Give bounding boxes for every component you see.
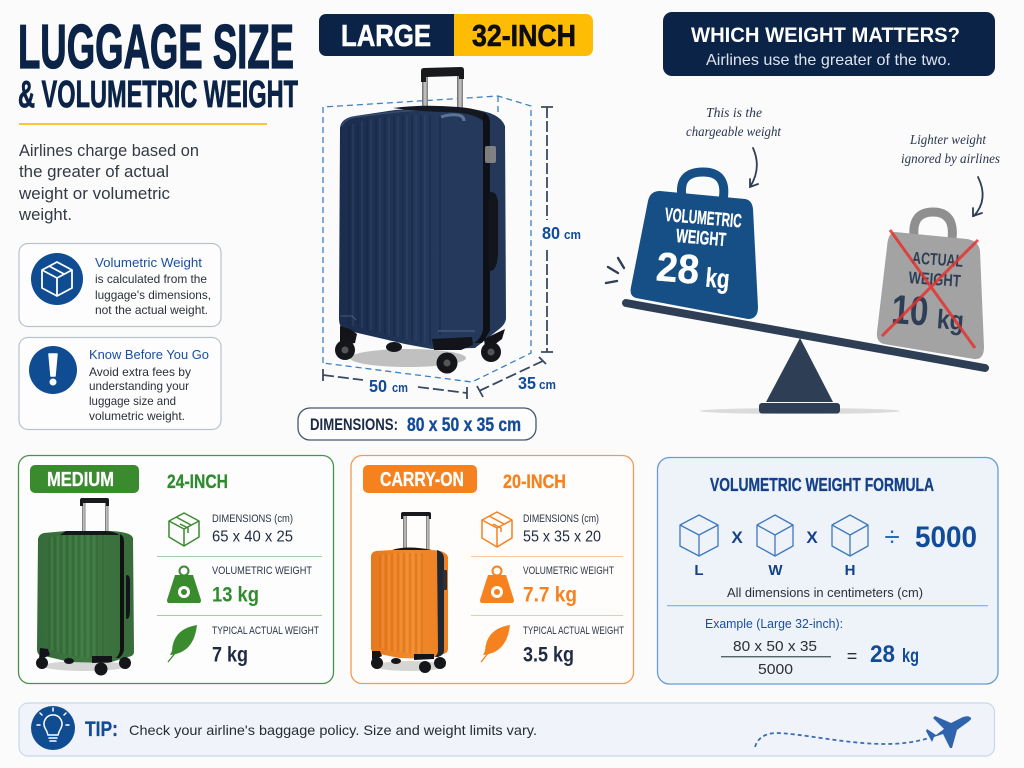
icon: green box [169,513,199,546]
depth measure: 35 cm: cm [539,377,556,392]
note: ignored weight [901,132,1000,216]
weight: volumetric 28 kg: WEIGHT [675,226,727,251]
size badge: large 32-inch: 32-INCH [472,18,576,53]
typical actual weight row: TYPICAL ACTUAL WEIGHT [212,625,319,637]
worked example: 80 x 50 x 35 [733,638,817,655]
dashed dimension box [323,96,531,382]
title [18,13,298,116]
icon: orange weight [480,566,514,603]
units note: All dimensions in centimeters (cm) [727,585,923,600]
info card: volumetric weight: Volumetric Weight [95,256,203,270]
formula operators and labels: ÷ [884,521,900,552]
panel: volumetric weight formula [658,458,998,684]
depth measure: 35 cm [477,357,556,397]
formula heading: VOLUMETRIC WEIGHT FORMULA [710,475,934,495]
formula operators and labels: L [694,562,704,579]
weight: volumetric 28 kg: VOLUMETRIC [664,205,743,232]
icon: box [31,253,83,305]
badge: carry-on: CARRY-ON [380,469,464,491]
worked example: 5000 [758,661,793,678]
worked example: = [847,646,857,666]
info card: know before you go: Avoid extra fees by [89,365,191,379]
flight path [755,733,929,747]
volumetric weight row: VOLUMETRIC WEIGHT [212,565,312,577]
dimensions row: 55 x 35 x 20 [523,528,601,546]
large suitcase with dimension box [323,67,581,399]
volumetric weight row: 7.7 kg [523,584,577,606]
dimensions row: 65 x 40 x 25 [212,528,293,546]
icon: exclamation [29,346,77,394]
info card: volumetric weight: is calculated from the [95,272,207,286]
typical actual weight row [523,625,624,666]
info card: know before you go: understanding your [89,379,189,393]
height measure: 80 cm: 80 [542,223,560,243]
width measure: 50 cm [323,369,467,399]
panel: medium 24-inch [18,456,334,684]
note: ignored weight: ignored by airlines [901,151,1000,166]
intro paragraph: weight. [18,205,72,224]
width measure: 50 cm: cm [392,380,408,395]
formula operators and labels [694,521,900,579]
red cross [882,230,978,348]
size badge: large 32-inch [319,14,593,56]
dimensions pill [298,408,536,440]
weight: volumetric 28 kg: 28 [654,243,701,293]
formula operators and labels: W [768,562,783,579]
typical actual weight row: 7 kg [212,644,248,666]
dimensions row: DIMENSIONS (cm) [523,513,599,525]
note: ignored weight: Lighter weight [909,132,987,147]
icon: cube L [680,515,718,556]
height measure: 80 cm [541,107,581,352]
intro paragraph: Airlines charge based on [19,141,199,160]
intro paragraph: the greater of actual [19,162,169,181]
worked example: 28 [870,641,895,668]
divisor: 5000 [915,521,977,554]
seesaw scale [606,258,985,414]
height measure: 80 cm: cm [564,227,581,242]
dimensions row [212,513,293,546]
size: 24-inch: 24-INCH [167,472,228,493]
tip bar: Check your airline's baggage policy. Size and weight limits vary. [129,722,537,738]
badge: carry-on [363,465,477,493]
icon: orange feather [481,625,510,662]
suitcase: carry-on orange [371,512,448,673]
note: chargeable weight [686,105,782,187]
volumetric weight row [523,565,614,606]
dimensions pill: 80 x 50 x 35 cm [407,415,521,436]
volumetric weight row: 13 kg [212,584,259,606]
weight: actual 10 kg crossed out: 10 [890,286,930,335]
volumetric weight row [212,565,312,606]
icon: cube W [757,515,793,556]
width measure: 50 cm: 50 [369,376,387,396]
icon: green weight [167,566,201,603]
dimensions row [523,513,601,546]
dimensions pill: DIMENSIONS: [310,415,398,434]
title: LUGGAGE SIZE [18,13,294,82]
formula operators and labels: X [731,528,743,547]
badge: medium [30,465,139,493]
suitcase: large navy [335,67,506,374]
icon: orange box [482,512,512,547]
dimensions row: DIMENSIONS (cm) [212,513,293,525]
info card: volumetric weight [19,244,221,326]
icon: green feather [168,625,197,662]
worked example [705,616,919,678]
note: chargeable weight: chargeable weight [686,124,782,139]
note: chargeable weight: This is the [706,105,762,120]
impact lines [606,258,624,283]
intro paragraph [18,141,199,224]
typical actual weight row: 3.5 kg [523,644,574,666]
info card: know before you go [19,338,221,430]
worked example: Example (Large 32-inch): [705,616,843,631]
icon: light bulb [31,706,75,750]
weight: actual 10 kg crossed out: WEIGHT [908,268,962,291]
badge: medium: MEDIUM [47,469,114,491]
formula operators and labels: H [845,562,855,579]
icon: airplane [926,716,971,748]
typical actual weight row [212,625,319,666]
weight: actual 10 kg crossed out: kg [936,304,965,336]
which weight matters panel [663,12,995,76]
suitcase: medium green [36,498,134,676]
icon: cube H [832,515,868,556]
weight: actual 10 kg crossed out [877,212,984,359]
info card: know before you go: volumetric weight. [89,409,185,423]
which weight matters panel: Airlines use the greater of the two. [706,52,951,69]
intro paragraph: weight or volumetric [18,184,170,203]
volumetric weight row: VOLUMETRIC WEIGHT [523,565,614,577]
info card: know before you go: luggage size and [89,394,176,408]
panel: carry-on 20-inch [351,456,634,684]
size badge: large 32-inch: LARGE [341,18,431,53]
weight: volumetric 28 kg: kg [704,263,731,295]
info card: volumetric weight: luggage's dimensions, [95,288,211,302]
formula operators and labels: X [806,528,818,547]
tip text: TIP: [85,718,118,741]
worked example: kg [902,646,919,667]
typical actual weight row: TYPICAL ACTUAL WEIGHT [523,625,624,637]
weight: volumetric 28 kg [631,172,758,319]
tip bar [19,703,994,756]
title: & VOLUMETRIC WEIGHT [18,74,298,116]
weight: actual 10 kg crossed out: ACTUAL [912,248,964,271]
depth measure: 35 cm: 35 [518,373,536,393]
info card: know before you go: Know Before You Go [89,348,209,362]
size: 20-inch: 20-INCH [503,472,566,493]
which weight matters panel: WHICH WEIGHT MATTERS? [691,24,960,47]
info card: volumetric weight: not the actual weight. [95,303,208,317]
